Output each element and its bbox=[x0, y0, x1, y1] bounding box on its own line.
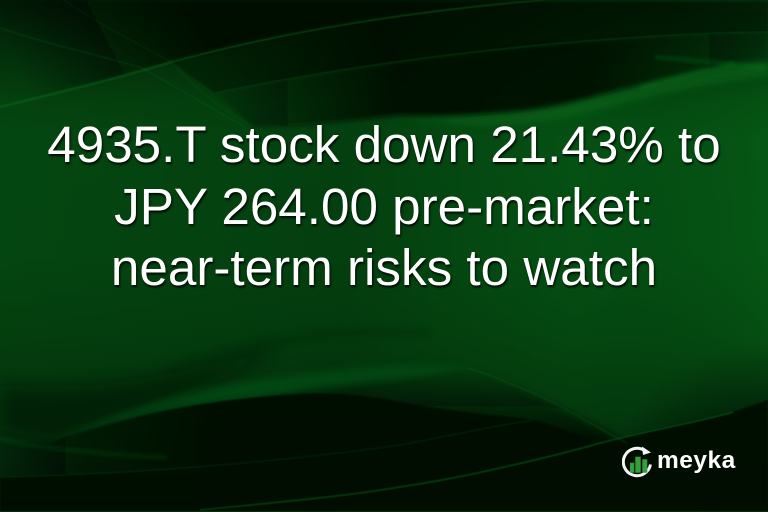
lower dark hill bbox=[0, 393, 533, 477]
lower soft dark swoosh bbox=[167, 332, 430, 373]
logo: meyka bbox=[622, 446, 652, 478]
icon: circular arrow with bars bbox=[622, 446, 652, 478]
lower right fade bbox=[598, 342, 768, 512]
title: JPY 264.00 pre-market: bbox=[114, 178, 654, 234]
title: 4935.T stock down 21.43% to bbox=[47, 116, 721, 173]
lower streaks bbox=[0, 368, 733, 510]
logo wordmark: meyka bbox=[657, 447, 736, 474]
left soft dark zone bbox=[0, 345, 280, 440]
upper dark sweeps bbox=[0, 0, 560, 107]
upper green band bbox=[400, 60, 768, 125]
title: near-term risks to watch bbox=[111, 239, 657, 296]
green band above hill bbox=[50, 365, 470, 442]
lower middle dark bbox=[200, 367, 710, 512]
top-left streaks and right streaks bbox=[0, 0, 768, 127]
bottom dark band bbox=[0, 400, 768, 512]
title bbox=[47, 116, 721, 296]
